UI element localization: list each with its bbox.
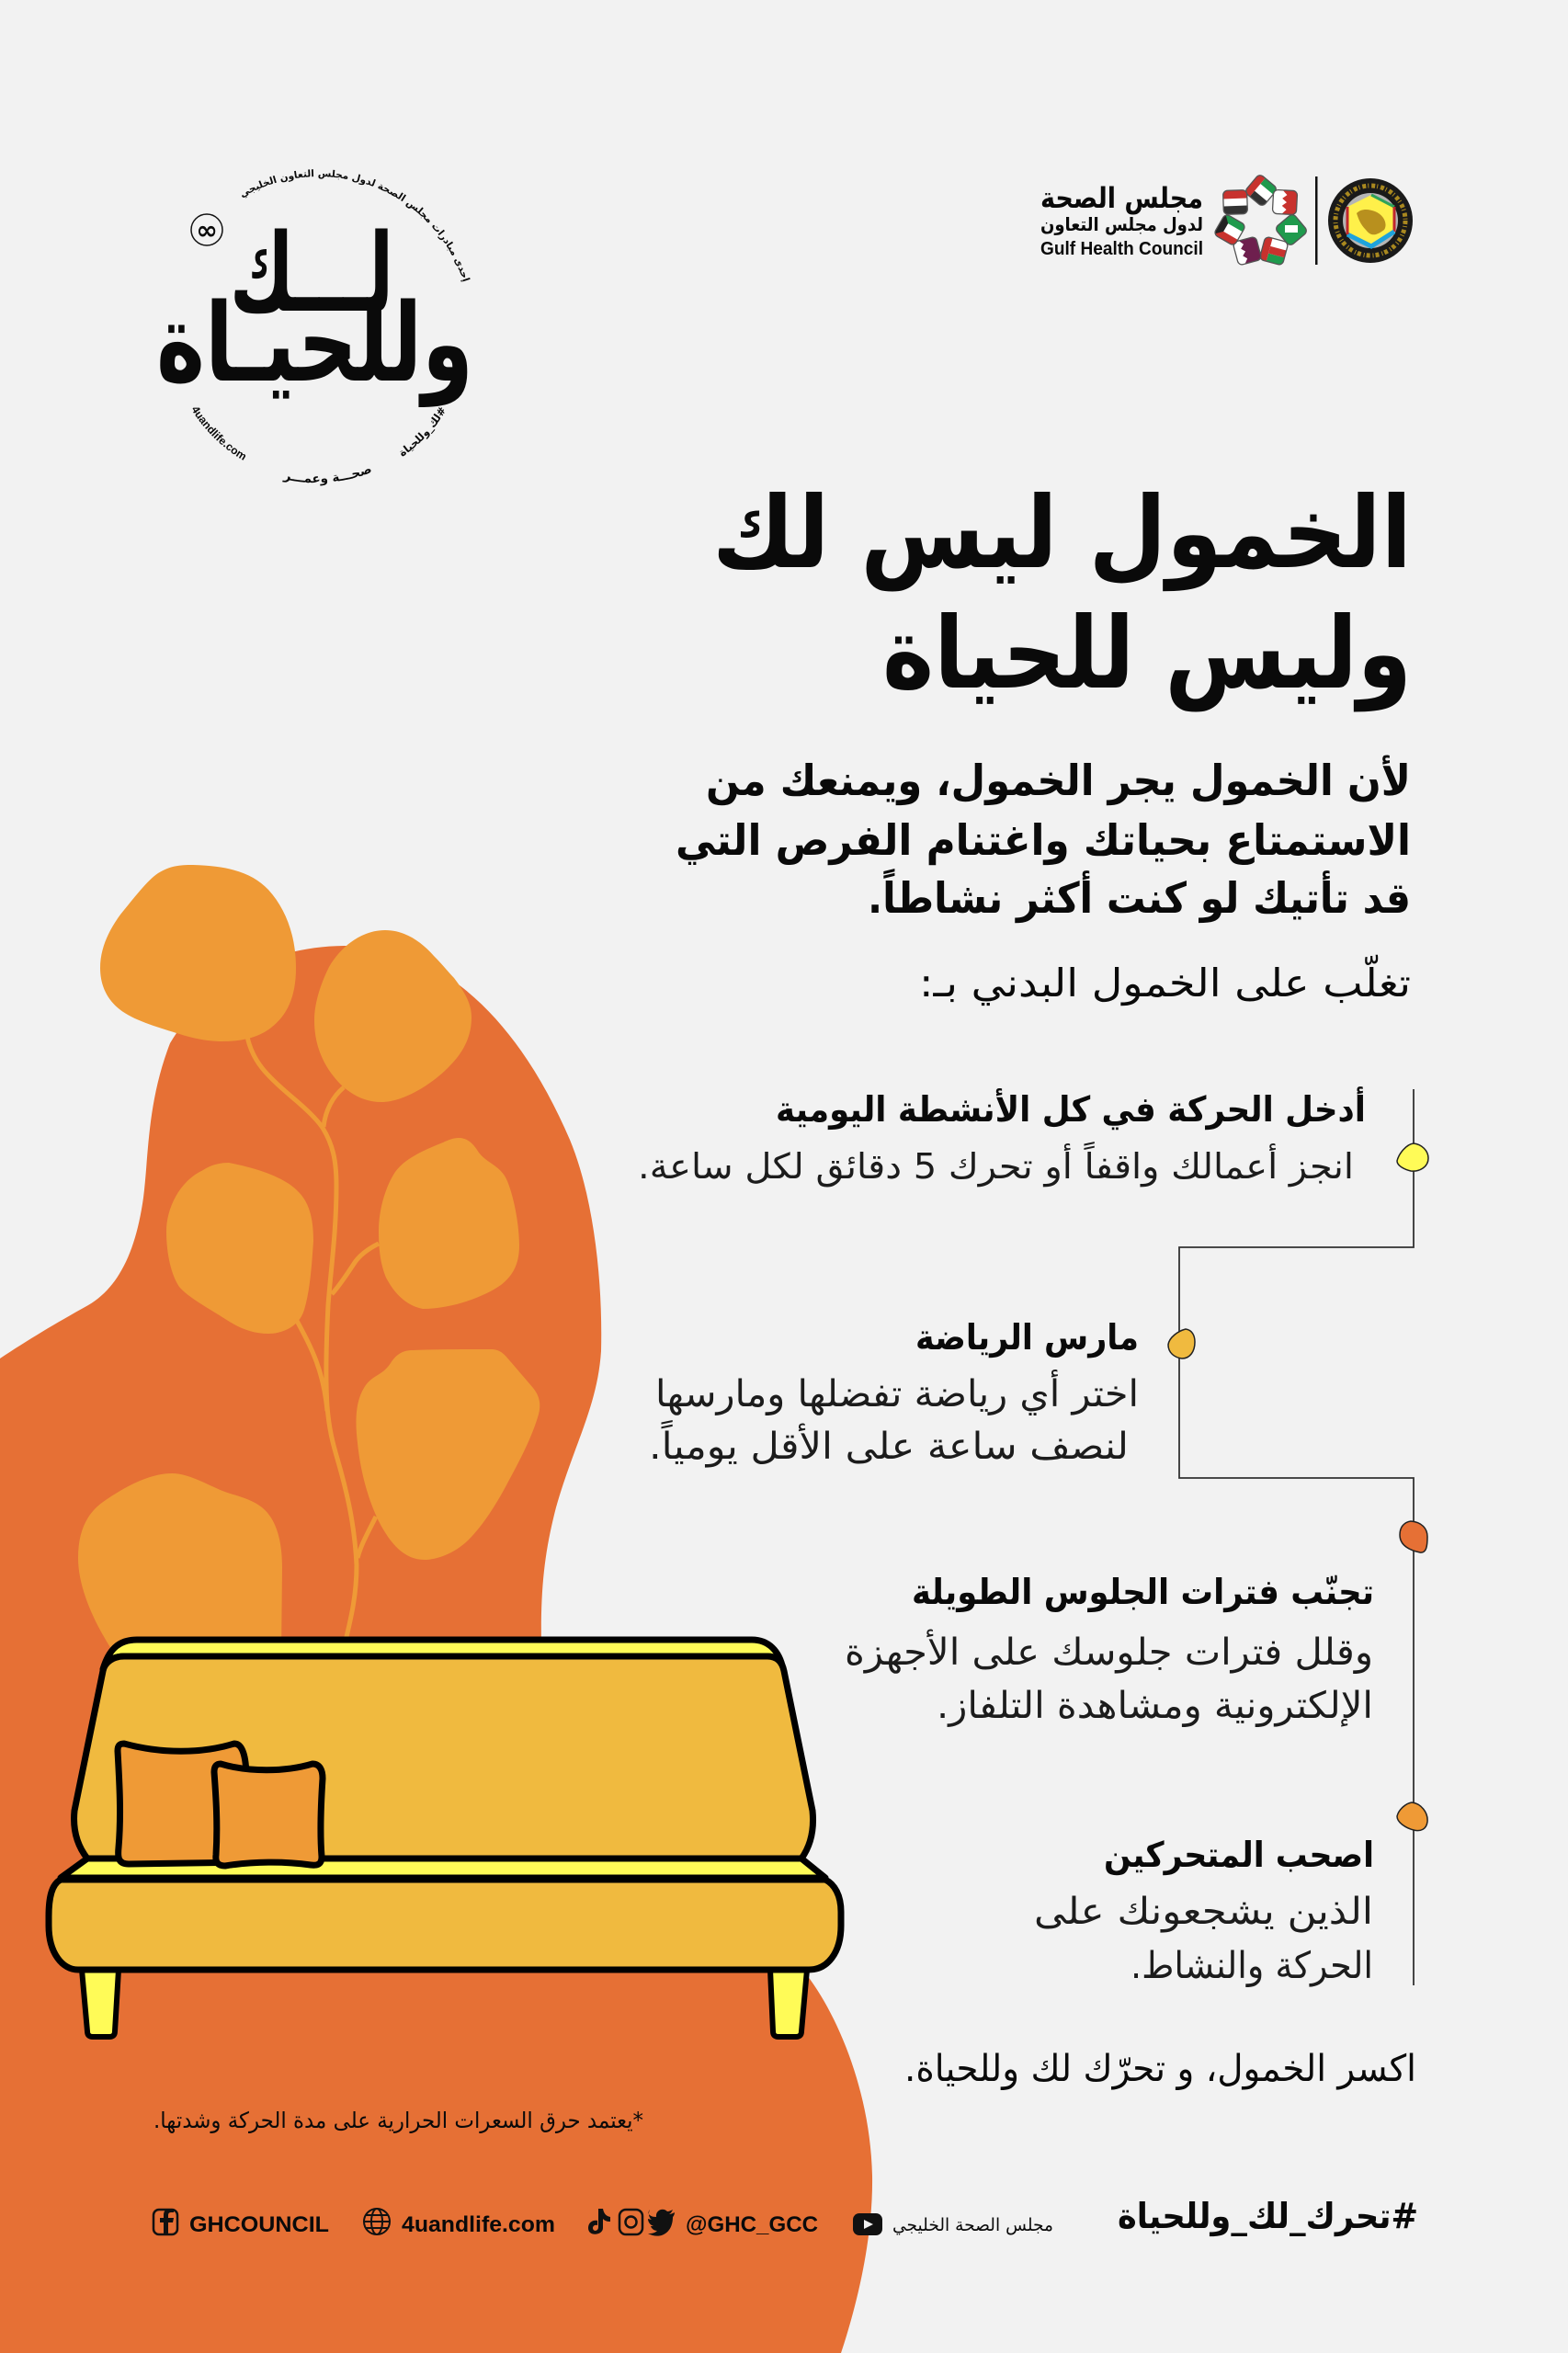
facebook handle: GHCOUNCIL	[189, 2212, 329, 2237]
pillow right	[214, 1764, 323, 1866]
icon: facebook	[153, 2209, 177, 2234]
youtube channel: مجلس الصحة الخليجي	[892, 2215, 1053, 2235]
item 3: avoid sitting: تجنّب فترات الجلوس الطويلة	[912, 1572, 1374, 1612]
roundel bottom tagline	[257, 460, 397, 483]
item 4: active friends: الحركة والنشاط.	[1131, 1945, 1373, 1987]
title	[712, 476, 1412, 712]
sofa seat base	[49, 1880, 841, 1970]
illustration: plant	[78, 865, 540, 1654]
logo: campaign roundel: صحـــة وعمـــر	[282, 469, 371, 485]
timeline dot yellow	[1397, 1143, 1428, 1171]
intro paragraph: قد تأتيك لو كنت أكثر نشاطاً.	[868, 869, 1411, 923]
logo: campaign roundel: 4uandlife.com	[193, 408, 246, 460]
item 3: avoid sitting	[845, 1572, 1374, 1727]
icon: globe	[364, 2209, 390, 2234]
roundel bottom-right hashtag	[395, 403, 450, 461]
icon: youtube	[853, 2213, 882, 2235]
item 1: daily movement: انجز أعمالك واقفاً أو تحرك 5 دقائق لكل ساعة.	[638, 1142, 1354, 1188]
item 3: avoid sitting: الإلكترونية ومشاهدة التلفاز.	[937, 1685, 1373, 1727]
sofa back	[74, 1656, 812, 1859]
leaf 6	[78, 1473, 282, 1654]
title: الخمول ليس لك	[712, 476, 1412, 592]
GCC emblem	[1328, 178, 1413, 263]
roundel infinity badge: ∞	[196, 215, 218, 245]
intro paragraph: الاستمتاع بحياتك واغتنام الفرص التي	[676, 815, 1411, 865]
item 1: daily movement: أدخل الحركة في كل الأنشطة اليومية	[776, 1086, 1366, 1130]
closing line: اكسر الخمول، و تحرّك لك وللحياة.	[904, 2048, 1416, 2090]
leaf 1	[100, 865, 296, 1041]
item 2: exercise: مارس الرياضة	[915, 1317, 1139, 1358]
logo text	[1040, 182, 1203, 259]
logo: Gulf Health Council	[1040, 174, 1413, 266]
item 4: active friends: اصحب المتحركين	[1104, 1835, 1374, 1875]
item 2: exercise: لنصف ساعة على الأقل يومياً.	[649, 1419, 1129, 1468]
sofa legs	[82, 1970, 807, 2037]
icon: twitter	[648, 2210, 675, 2236]
item 3: avoid sitting: وقلل فترات جلوسك على الأجهزة	[845, 1629, 1373, 1674]
roundel big word: wa lil hayat: وللحيـاة	[156, 279, 473, 407]
item 4: active friends	[1034, 1835, 1374, 1987]
timeline dot light orange	[1397, 1802, 1427, 1831]
item 2: exercise	[649, 1317, 1139, 1468]
divider	[1315, 176, 1318, 265]
logo text: مجلس الصحة	[1040, 182, 1203, 215]
leaf 2	[314, 930, 472, 1102]
item 2: exercise: اختر أي رياضة تفضلها ومارسها	[655, 1370, 1139, 1415]
logo: campaign roundel: إحدى مبادرات مجلس الصحة لدول مجلس التعاون الخليجي	[242, 169, 471, 282]
timeline connector	[1179, 1089, 1414, 1985]
footer: social links	[153, 2209, 1053, 2237]
lead-in line: تغلّب على الخمول البدني بـ:	[919, 954, 1411, 1006]
timeline dot amber	[1168, 1329, 1195, 1358]
background orange blob	[0, 946, 872, 2353]
sofa top strip	[103, 1640, 783, 1669]
logo: campaign roundel: #لك_وللحياة	[401, 407, 445, 456]
logo text: لدول مجلس التعاون	[1040, 213, 1203, 235]
leaf 4	[379, 1138, 519, 1309]
website: 4uandlife.com	[402, 2212, 555, 2237]
illustration: sofa	[49, 1640, 841, 2037]
leaf 3	[166, 1163, 313, 1334]
intro paragraph	[676, 755, 1411, 923]
intro paragraph: لأن الخمول يجر الخمول، ويمنعك من	[706, 755, 1411, 805]
footnote: *يعتمد حرق السعرات الحرارية على مدة الحركة وشدتها.	[153, 2108, 643, 2133]
roundel bottom-left url	[191, 409, 250, 464]
icon: tiktok	[588, 2209, 610, 2234]
icon: instagram	[619, 2210, 642, 2234]
sofa seat cushion	[61, 1859, 825, 1878]
roundel big word: lak: لـــك	[230, 210, 393, 336]
item 4: active friends: الذين يشجعونك على	[1034, 1891, 1373, 1933]
item 1: daily movement	[638, 1086, 1366, 1188]
flag star	[1213, 174, 1308, 266]
pillow left	[118, 1744, 246, 1864]
leaf 5	[356, 1349, 540, 1560]
plant stem	[247, 1037, 379, 1641]
hashtag: #تحرك_لك_وللحياة	[1118, 2196, 1418, 2237]
roundel top arc text	[223, 176, 469, 304]
title: وليس للحياة	[882, 597, 1412, 712]
timeline dot orange	[1400, 1521, 1427, 1552]
roundel infinity badge	[191, 214, 222, 245]
logo: campaign roundel	[156, 169, 473, 485]
social handle: @GHC_GCC	[686, 2212, 818, 2237]
logo text: Gulf Health Council	[1040, 239, 1203, 259]
